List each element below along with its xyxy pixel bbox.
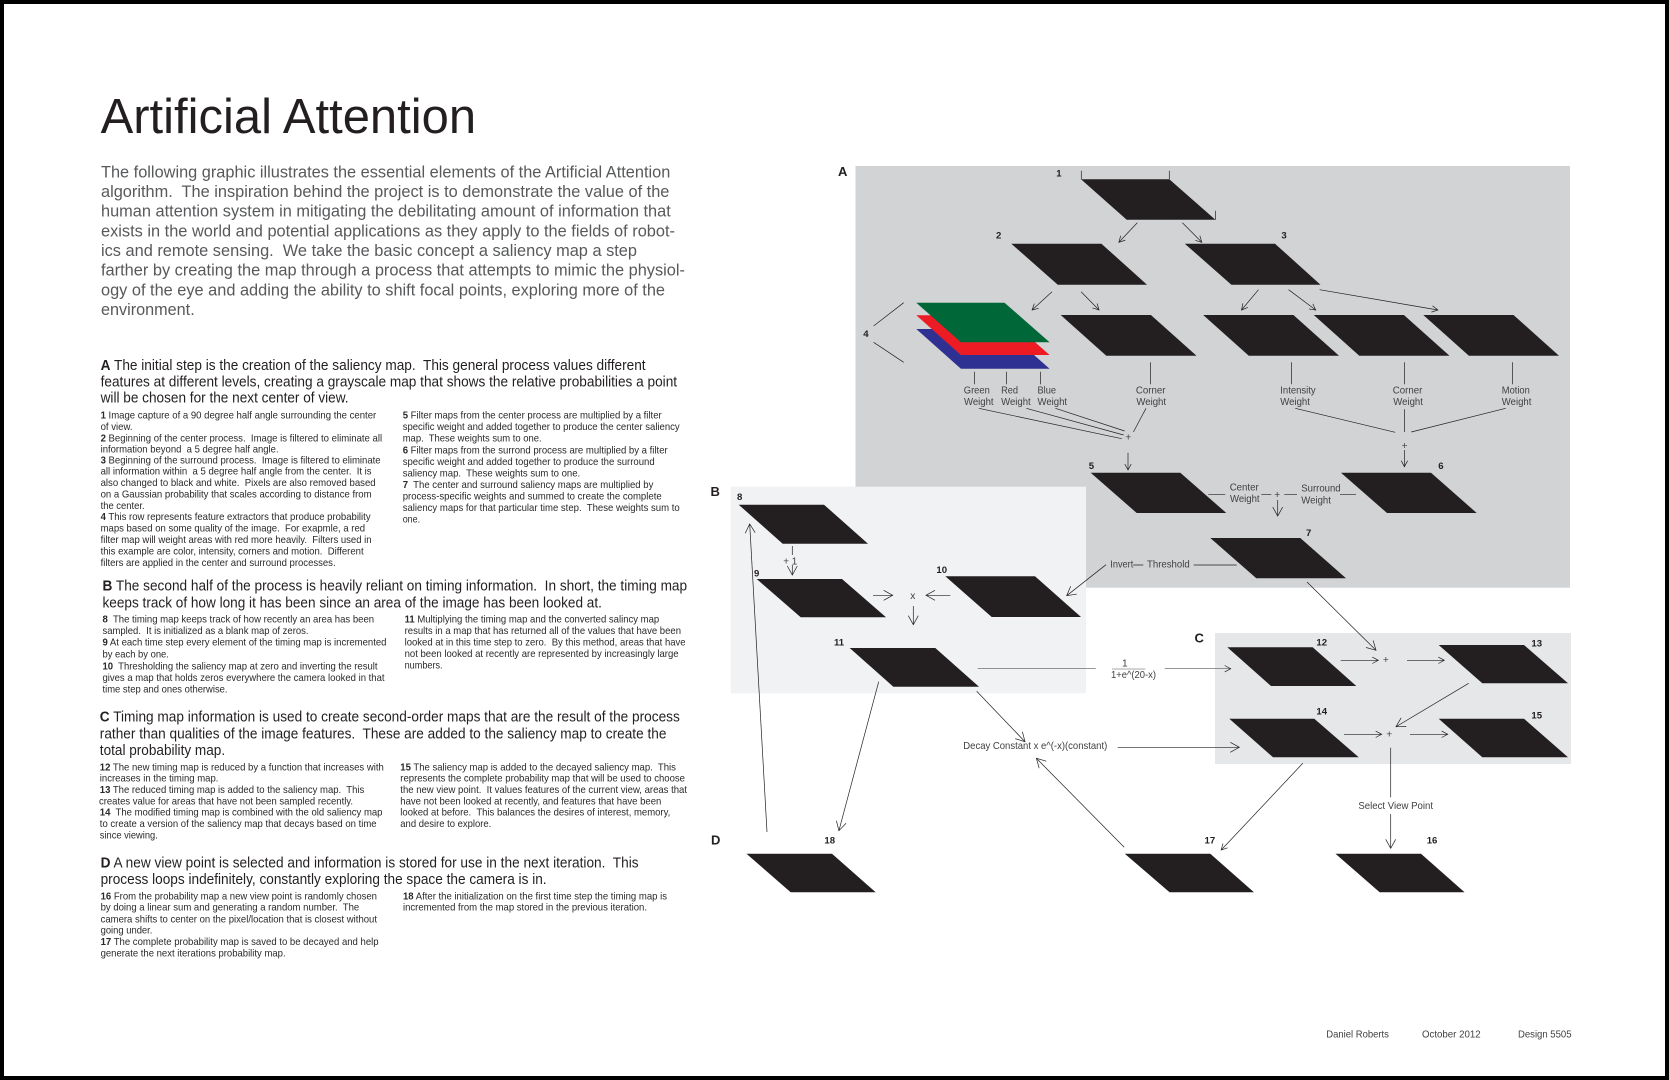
- section C right column: and desire to explore.: [400, 819, 491, 830]
- section A heading: will be chosen for the next center of view.: [100, 391, 349, 407]
- map 5: center saliency: [1091, 473, 1226, 513]
- map 4: green filter layer: [916, 303, 1050, 342]
- center and surround weighting: Center: [1230, 482, 1259, 493]
- section A right column: 7 The center and surround saliency maps are multiplied by: [403, 480, 654, 491]
- line: 11 to formula: [978, 668, 1096, 670]
- section B right column: numbers.: [405, 661, 443, 672]
- weight labels: [964, 385, 1532, 408]
- section A left column: maps based on some quality of the image. For exapmle, a red: [101, 524, 365, 535]
- map 9: incremented timing map: [757, 579, 886, 617]
- map 13: modified timing map: [1439, 645, 1568, 683]
- intro paragraph: [101, 162, 685, 319]
- title: Artificial Attention: [101, 90, 476, 144]
- section D left column: generate the next iterations probability map.: [101, 949, 286, 960]
- map numbers: 11: [834, 637, 845, 648]
- intro paragraph: environment.: [101, 300, 195, 319]
- section A left column: filter map will weight areas with red more heavily. Filters used in: [101, 535, 372, 546]
- section D left column: by doing a linear sum and generating a random number. The: [101, 903, 360, 914]
- label: plus one: + 1: [783, 556, 798, 567]
- weight labels: Weight: [1136, 397, 1166, 408]
- map numbers: 2: [996, 231, 1001, 242]
- section C heading: total probability map.: [100, 743, 225, 759]
- section C left column: [99, 762, 384, 842]
- map numbers: 12: [1316, 637, 1327, 648]
- center weights converging lines: [979, 408, 1146, 439]
- weight labels: Weight: [1393, 397, 1423, 408]
- section B left column: by each by one.: [102, 649, 169, 660]
- footer credits: Design 5505: [1518, 1030, 1572, 1041]
- arrow: 18 to 8: [750, 524, 767, 832]
- weight labels: Blue: [1038, 385, 1056, 396]
- decay formula label: Decay Constant x e^(-x)(constant): [963, 741, 1107, 752]
- arrow: 13 to lower plus: [1396, 683, 1469, 727]
- section C left column: 13 The reduced timing map is added to the saliency map. This: [100, 785, 364, 796]
- arrow: 11 to decay: [977, 691, 1025, 742]
- map 10: thresholded saliency: [945, 576, 1081, 617]
- section B right column: [405, 615, 686, 672]
- arrow: weighted sum to 7: [1277, 500, 1279, 516]
- section B heading: B The second half of the process is heavily reliant on timing information. In short, the timing map: [102, 579, 687, 595]
- line: 8 to plus one: [791, 546, 793, 555]
- weight labels: Green: [964, 385, 990, 396]
- center and surround weighting: [1208, 482, 1356, 506]
- section C right column: represents the complete probability map that will be used to choose: [400, 774, 685, 785]
- panel letter C: C: [1194, 631, 1204, 646]
- invert and threshold labels: Invert: [1110, 560, 1133, 571]
- arrow: formula to 12: [1165, 668, 1231, 670]
- section B left column: gives a map that holds zeros everywhere the camera looked in that: [102, 673, 385, 684]
- surround weights converging lines: [1295, 408, 1506, 432]
- arrow: 17 to decay: [1036, 758, 1124, 847]
- arrow: 3 to intensity filter: [1242, 290, 1258, 310]
- panel A background: [856, 166, 1570, 588]
- arrow: 11 to 18: [839, 682, 879, 831]
- section B right column: not been looked at recently are represented by increasingly large: [405, 649, 679, 660]
- section A left column: filters are applied in the center and surround processes.: [101, 558, 336, 569]
- weight labels: Corner: [1136, 385, 1166, 396]
- bracket for label 4: [874, 303, 904, 362]
- intro paragraph: algorithm. The inspiration behind the project is to demonstrate the value of the: [101, 182, 669, 201]
- weight labels: Corner: [1393, 385, 1423, 396]
- arrow: invert to 10: [1067, 565, 1106, 596]
- section D left column: 16 From the probability map a new view point is randomly chosen: [101, 891, 377, 902]
- section D right column: 18 After the initialization on the first time step the timing map is: [403, 891, 667, 902]
- map 14: decayed saliency: [1229, 719, 1359, 757]
- section A right column: [403, 411, 681, 525]
- section C right column: the new view point. It values features of the current view, areas that: [400, 785, 687, 796]
- section A left column: also changed to black and white. Pixels are also removed based: [101, 478, 376, 489]
- arrow: plus to 15: [1410, 733, 1448, 735]
- section D right column: [403, 891, 667, 914]
- center and surround weighting: Weight: [1230, 494, 1260, 505]
- plus sign lower: +: [1386, 730, 1392, 740]
- section B left column: 8 The timing map keeps track of how recently an area has been: [102, 615, 374, 626]
- section B text: [102, 579, 687, 696]
- center and surround weighting: Surround: [1301, 484, 1341, 495]
- section A right column: saliency maps for that particular time step. These weights sum to: [403, 503, 680, 514]
- section B heading: keeps track of how long it has been since an area of the image has been looked at.: [102, 596, 602, 612]
- section D left column: [101, 891, 379, 960]
- section B left column: time step and ones otherwise.: [102, 685, 228, 696]
- arrow: 9 to multiply: [873, 594, 893, 596]
- map numbers: 3: [1281, 231, 1287, 242]
- section B left column: 10 Thresholding the saliency map at zero and inverting the result: [102, 662, 378, 673]
- map 4: intensity filter: [1203, 315, 1339, 356]
- arrow: surround sum to 6: [1403, 450, 1405, 467]
- section C heading: C Timing map information is used to create second-order maps that are the result of the process: [100, 710, 680, 726]
- section A left column: 3 Beginning of the surround process. Image is filtered to eliminate: [101, 455, 381, 466]
- map numbers: 7: [1306, 528, 1311, 539]
- arrow: 1 to 2: [1119, 223, 1137, 242]
- section C left column: to create a version of the saliency map that decays based on time: [100, 819, 377, 830]
- section C right column: [400, 762, 687, 830]
- map numbers: 10: [936, 565, 947, 576]
- map 1: image capture: [1081, 171, 1215, 220]
- section B right column: looked at in this time step to zero. By this method, areas that have: [405, 637, 686, 648]
- map 6: surround saliency: [1341, 473, 1477, 513]
- intro paragraph: exists in the world and potential applications as they apply to the fields of robot-: [101, 221, 675, 240]
- arrow: multiply to 11: [912, 606, 914, 625]
- weight labels: Weight: [1038, 397, 1067, 408]
- arrow: 1 to 3: [1182, 223, 1202, 242]
- section A text: [100, 358, 681, 569]
- map 4: surround corner filter: [1314, 315, 1450, 356]
- section A heading: [100, 358, 677, 407]
- weight labels: Weight: [1280, 397, 1310, 408]
- weight labels: Weight: [1502, 397, 1532, 408]
- section A right column: 5 Filter maps from the center process are multiplied by a filter: [403, 411, 662, 422]
- map 18: stored timing map: [746, 854, 876, 892]
- footer credits: Daniel Roberts: [1326, 1030, 1389, 1041]
- label: select view point: Select View Point: [1358, 801, 1433, 812]
- panel letter A: A: [838, 164, 848, 179]
- map numbers: 16: [1427, 835, 1437, 846]
- map numbers: 4: [863, 329, 869, 340]
- plus sign upper: +: [1383, 655, 1389, 666]
- section A right column: 6 Filter maps from the surrond process are multiplied by a filter: [403, 445, 668, 456]
- section D heading: [101, 856, 639, 888]
- section C text: [99, 710, 687, 842]
- plus sign: center sum: +: [1125, 432, 1131, 443]
- map 12: reduced timing map: [1227, 647, 1356, 686]
- intro paragraph: The following graphic illustrates the essential elements of the Artificial Attention: [101, 162, 670, 181]
- section C left column: creates value for areas that have not been sampled recently.: [99, 796, 353, 807]
- arrow: decay to 14: [1118, 746, 1239, 748]
- map 8: timing map: [739, 505, 868, 544]
- section B right column: results in a map that has returned all of the values that have been: [405, 626, 681, 637]
- section C left column: since viewing.: [100, 831, 158, 842]
- arrow: 10 to multiply: [926, 594, 950, 596]
- section C left column: 14 The modified timing map is combined with the old saliency map: [100, 808, 383, 819]
- section C right column: 15 The saliency map is added to the decayed saliency map. This: [400, 762, 676, 773]
- map 4: motion filter: [1423, 315, 1559, 356]
- section D left column: camera shifts to center on the pixel/location that is closest without: [101, 914, 377, 925]
- center and surround weighting: +: [1274, 490, 1280, 501]
- section A left column: 4 This row represents feature extractors that produce probability: [101, 512, 371, 523]
- weight labels: Weight: [1001, 397, 1031, 408]
- section A right column: one.: [403, 514, 420, 525]
- map numbers: 13: [1531, 639, 1542, 650]
- panel C background: [1215, 633, 1571, 764]
- section A left column: 2 Beginning of the center process. Image is filtered to eliminate all: [101, 433, 382, 444]
- section C left column: 12 The new timing map is reduced by a function that increases with: [100, 762, 384, 773]
- weight labels: Red: [1001, 385, 1018, 396]
- section D heading: D A new view point is selected and information is stored for use in the next iteration. This: [101, 856, 639, 872]
- map numbers: 8: [737, 492, 743, 503]
- arrow: 3 to corner filter: [1289, 290, 1316, 310]
- map 4: red filter layer: [916, 315, 1050, 355]
- intro paragraph: ics and remote sensing. We take the basic concept a saliency map a step: [101, 241, 637, 260]
- plus sign: surround sum: +: [1402, 441, 1408, 452]
- panel letter D: D: [711, 832, 720, 847]
- map numbers: 6: [1438, 461, 1444, 472]
- map numbers: 5: [1089, 461, 1095, 472]
- map numbers: 17: [1204, 835, 1215, 846]
- section A left column: on a Gaussian probability that scales according to distance from: [101, 489, 372, 500]
- section A right column: specific weight and added together to produce the surround: [403, 457, 655, 468]
- map 3: surround process: [1185, 244, 1320, 285]
- section A right column: specific weight and added together to produce the center saliency: [403, 422, 681, 433]
- map numbers: 9: [754, 568, 759, 579]
- section B right column: 11 Multiplying the timing map and the converted salincy map: [405, 615, 660, 626]
- section B left column: sampled. It is initialized as a blank map of zeros.: [102, 626, 308, 637]
- multiply sign: x: [910, 591, 915, 602]
- section A left column: of view.: [101, 422, 133, 433]
- lines from filters to weights: [974, 362, 1512, 384]
- map 11: multiplied map: [850, 648, 979, 687]
- arrow: center sum to 5: [1127, 453, 1129, 470]
- arrow: 7 to plus: [1307, 582, 1376, 650]
- line: lower plus to select view point: [1390, 748, 1392, 797]
- arrow: 2 to color filters: [1032, 292, 1052, 310]
- section A right column: map. These weights sum to one.: [403, 433, 542, 444]
- map 2: center process: [1011, 244, 1147, 285]
- section A left column: 1 Image capture of a 90 degree half angle surrounding the center: [101, 411, 377, 422]
- arrow: plus one to 9: [791, 565, 793, 575]
- arrow: 12 to plus: [1341, 659, 1378, 661]
- section A left column: this example are color, intensity, corners and motion. Different: [101, 547, 364, 558]
- map numbers: 1: [1056, 169, 1062, 180]
- formula fraction: 1: [1122, 659, 1128, 670]
- intro paragraph: ogy of the eye and adding the ability to shift focal points, exploring more of the: [101, 280, 665, 299]
- section C heading: rather than qualities of the image features. These are added to the saliency map to create the: [100, 726, 666, 742]
- section A heading: features at different levels, creating a grayscale map that shows the relative probabilities a point: [101, 375, 677, 391]
- section C heading: [100, 710, 680, 759]
- section A left column: information beyond a 5 degree half angle.: [101, 445, 279, 456]
- arrow: plus to 13: [1407, 659, 1444, 661]
- section D left column: 17 The complete probability map is saved to be decayed and help: [101, 937, 379, 948]
- section A left column: the center.: [101, 501, 145, 512]
- arrow: 14 to 17: [1221, 763, 1303, 850]
- section C left column: increases in the timing map.: [100, 774, 218, 785]
- footer credits: [1326, 1030, 1572, 1041]
- formula fraction: 1+e^(20-x): [1111, 670, 1156, 681]
- invert and threshold labels: Threshold: [1147, 560, 1190, 571]
- intro paragraph: human attention system in mitigating the debilitating amount of information that: [101, 202, 671, 221]
- weight labels: Intensity: [1280, 385, 1317, 396]
- section C right column: have not been looked at recently, and features that have been: [400, 796, 661, 807]
- map numbers: [737, 169, 1543, 846]
- section B left column: 9 At each time step every element of the timing map is incremented: [102, 638, 387, 649]
- section B heading: [102, 579, 687, 612]
- section A right column: process-specific weights and summed to create the complete: [403, 492, 662, 503]
- map 17: stored probability map: [1125, 854, 1254, 892]
- map 16: view point: [1336, 854, 1465, 892]
- panel B background: [731, 487, 1086, 693]
- map 7: complete saliency: [1210, 538, 1346, 578]
- panel letter B: B: [710, 484, 720, 499]
- footer credits: October 2012: [1422, 1030, 1481, 1041]
- section D text: [101, 856, 667, 960]
- intro paragraph: farther by creating the map through a process that attempts to mimic the physiol-: [101, 261, 685, 280]
- arrow: select view point to 16: [1390, 814, 1392, 848]
- section C right column: looked at before. This balances the desires of interest, memory,: [400, 808, 670, 819]
- section A heading: A The initial step is the creation of the saliency map. This general process values different: [101, 358, 646, 374]
- map numbers: 18: [824, 835, 836, 846]
- map 4: center corner filter: [1061, 315, 1196, 356]
- section A right column: saliency map. These weights sum to one.: [403, 468, 580, 479]
- arrow: 3 to motion filter: [1320, 290, 1438, 310]
- section A left column: [101, 411, 382, 569]
- map numbers: 15: [1531, 710, 1543, 721]
- formula fraction: [1111, 659, 1156, 681]
- map 4: blue filter layer: [916, 329, 1050, 369]
- map numbers: 14: [1316, 707, 1328, 718]
- section D heading: process loops indefinitely, constantly exploring the space the camera is in.: [101, 872, 547, 888]
- weight labels: Motion: [1502, 385, 1530, 396]
- section B left column: [102, 615, 387, 696]
- section D right column: incremented from the map stored in the previous iteration.: [403, 903, 647, 914]
- invert and threshold labels: [1110, 560, 1237, 571]
- center and surround weighting: Weight: [1301, 495, 1331, 506]
- section A left column: all information within a 5 degree half angle from the center. It is: [101, 467, 372, 478]
- map 15: probability map: [1439, 719, 1568, 757]
- section D left column: going under.: [101, 926, 152, 937]
- arrow: 14 to plus: [1344, 733, 1382, 735]
- weight labels: Weight: [964, 397, 994, 408]
- arrow: 2 to corner filter: [1081, 292, 1099, 310]
